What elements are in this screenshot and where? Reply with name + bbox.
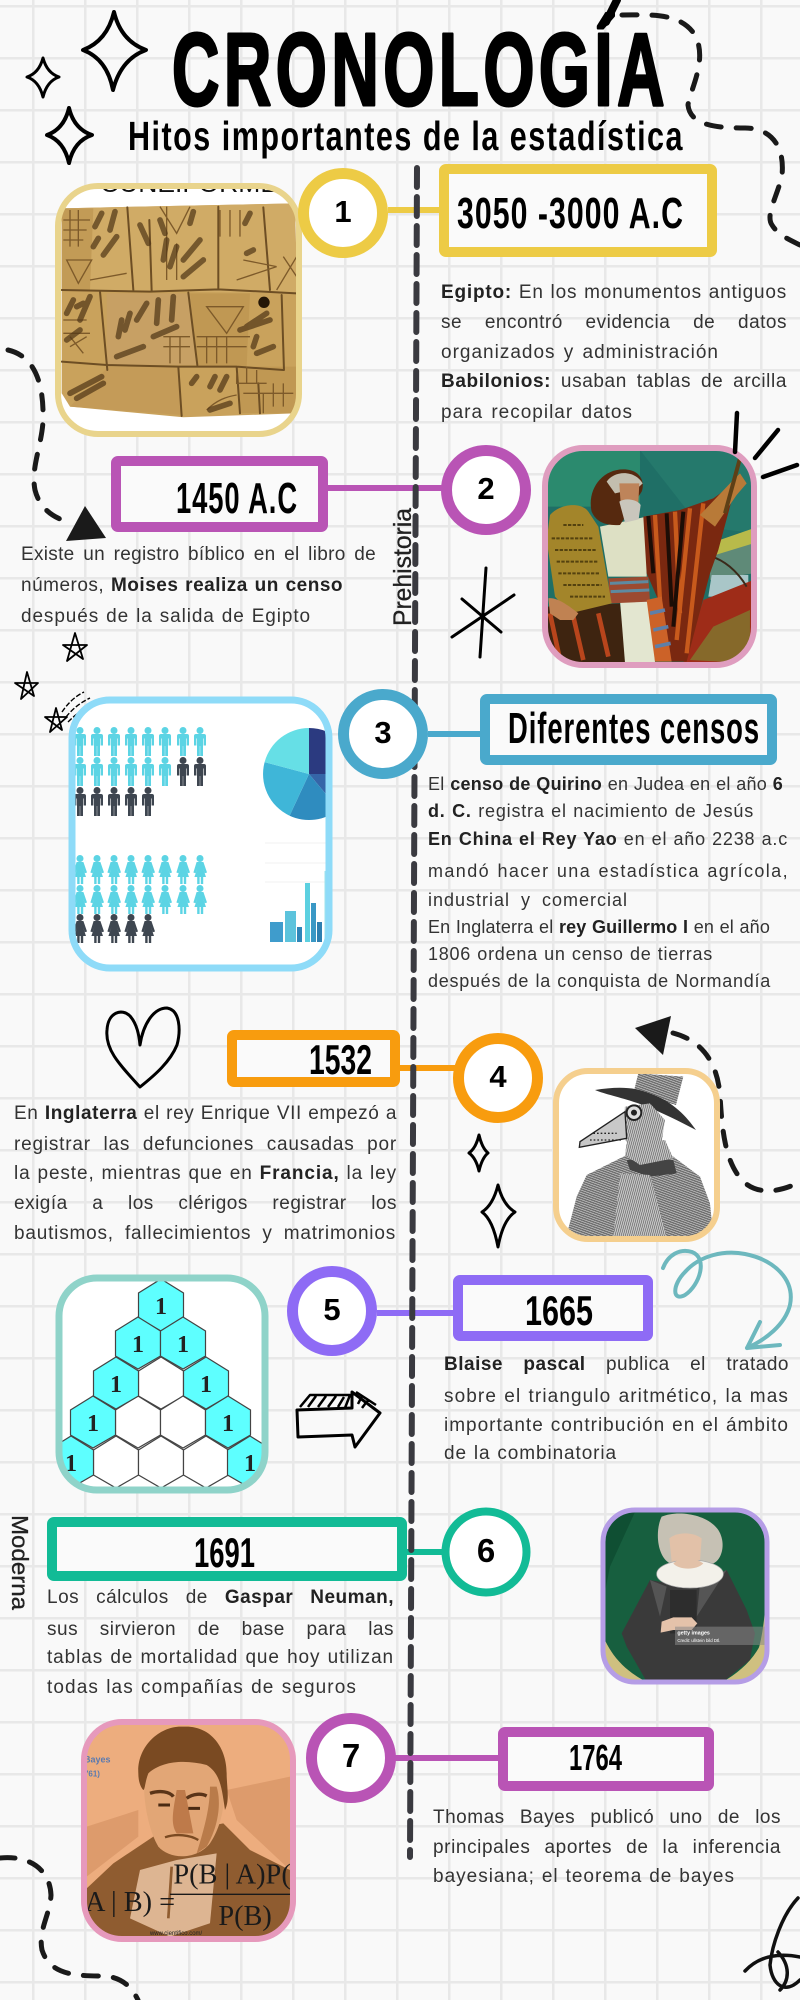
text block: diferentes censos: d. C. registra el nacimiento de Jesús — [428, 801, 754, 821]
text block: diferentes censos: industrial y comercial — [428, 890, 628, 910]
date box 4: 1532 — [309, 1036, 372, 1083]
connectors — [328, 210, 498, 1758]
hexagon numbers: 1 — [222, 1411, 234, 1437]
dashed curve with arrow: plague doctor — [635, 1016, 800, 1191]
text block: Egipto y Babilonios: Egipto: En los monumentos antiguos — [441, 282, 787, 303]
number circle 3 — [344, 694, 422, 774]
hexagon numbers: 1 — [110, 1372, 122, 1398]
icon: doodle stars — [15, 633, 92, 732]
text block: censo de Moises: después de la salida de Egipto — [21, 606, 311, 627]
text block: Blaise Pascal — [444, 1354, 789, 1464]
text block: censo de Moises: Existe un registro bíblico en el libro de — [21, 544, 376, 565]
text block: 1532: En Inglaterra el rey Enrique VII empezó a — [14, 1103, 397, 1124]
panel: Neuman portrait — [600, 1508, 770, 1687]
number circle 7 — [312, 1718, 390, 1798]
date box 6 — [52, 1522, 402, 1576]
number circle 6 — [446, 1512, 526, 1592]
date box 1 — [444, 169, 712, 252]
hexagon numbers: 1 — [65, 1451, 77, 1477]
icon: title sparkles — [27, 12, 146, 163]
text block: Thomas Bayes — [433, 1807, 781, 1887]
text block: Blaise Pascal: importante contribución en el ámbito — [444, 1415, 789, 1436]
number circle 4 — [458, 1038, 538, 1118]
panel: Bayes portrait: Bayes — [84, 1755, 110, 1765]
number circle 6: 6 — [477, 1532, 495, 1569]
text block: Gaspar Neuman: tablas de mortalidad que hoy utilizan — [47, 1647, 394, 1668]
text block: 1532: exigía a los clérigos registrar los — [14, 1193, 397, 1214]
date box 3 — [485, 699, 772, 760]
formula text: P(B | A)P( — [173, 1859, 291, 1890]
text block: diferentes censos: después de la conquista de Normandía — [428, 971, 771, 991]
pie chart — [263, 728, 326, 820]
panel: Bayes portrait: www.cientifico.com/ — [149, 1931, 203, 1937]
panel: Pascal triangle image — [48, 1278, 272, 1490]
text block: Egipto y Babilonios: Babilonios: usaban tablas de arcilla — [441, 371, 787, 392]
hexagon numbers: 1 — [200, 1372, 212, 1398]
text block: Egipto y Babilonios: organizados y administración — [441, 342, 719, 363]
date box 5: 1665 — [525, 1287, 593, 1334]
hexagon numbers: 1 — [244, 1451, 256, 1477]
text block: censo de Moises — [21, 544, 376, 627]
panel: Bayes portrait — [80, 1720, 297, 1943]
dashed curve with arrow: left — [8, 350, 106, 541]
hexagon numbers — [65, 1294, 256, 1477]
date box 5 — [458, 1280, 648, 1336]
text block: Gaspar Neuman — [47, 1587, 394, 1698]
date box 1: 3050 -3000 A.C — [457, 189, 684, 238]
date box 7 — [503, 1732, 709, 1786]
number circle 1 — [304, 174, 382, 252]
people icons: male group — [74, 727, 206, 816]
date box 7: 1764 — [569, 1737, 622, 1778]
icon: heart — [107, 1008, 179, 1087]
text block: censo de Moises: números, Moises realiza un censo — [21, 575, 343, 596]
people icons: female group — [73, 855, 207, 943]
icon: small sparkles — [469, 1135, 515, 1247]
icon: bottom right scribble — [745, 1898, 800, 1990]
dashed curve: top right — [622, 15, 800, 245]
panel: Moses image — [540, 440, 760, 670]
number circle 3: 3 — [374, 715, 392, 750]
number circle 4: 4 — [489, 1059, 507, 1094]
text block: Blaise Pascal: sobre el triangulo aritmético, la mas — [444, 1386, 789, 1407]
panel: census icons and charts — [72, 700, 355, 968]
number circle 1: 1 — [334, 194, 352, 229]
text block: 1532: la peste, mientras que en Francia, la ley — [14, 1163, 397, 1184]
text block: Gaspar Neuman: Los cálculos de Gaspar Neuman, — [47, 1587, 394, 1608]
text block: Egipto y Babilonios: para recopilar datos — [441, 402, 633, 423]
formula text — [85, 1859, 291, 1932]
number circle 2: 2 — [477, 471, 495, 506]
panel: cuneiform tablet image — [58, 171, 299, 434]
text block: diferentes censos: mandó hacer una estadística agrícola, — [428, 861, 789, 881]
number circle 5 — [292, 1272, 372, 1350]
date box 2: 1450 A.C — [176, 474, 298, 523]
getty watermark — [675, 1627, 768, 1645]
text block: diferentes censos — [428, 774, 789, 991]
icon: teal swirl arrow — [663, 1251, 791, 1348]
hexagon numbers: 1 — [155, 1294, 167, 1320]
number circle 2 — [446, 450, 526, 530]
hexagon grid — [94, 1357, 228, 1488]
hexagon numbers: 1 — [87, 1411, 99, 1437]
text block: diferentes censos: En China el Rey Yao en el año 2238 a.c — [428, 829, 788, 849]
icon: burst lines near Moses — [735, 413, 797, 477]
text block: 1532 — [14, 1103, 397, 1244]
panel: cuneiform tablet image: CUNEIFORME — [100, 171, 278, 198]
hexagon numbers: 1 — [132, 1332, 144, 1358]
date box 4 — [232, 1035, 395, 1083]
number circle 5: 5 — [323, 1292, 341, 1327]
text block: 1532: bautismos, fallecimientos y matrimonios — [14, 1223, 396, 1244]
text block: Thomas Bayes: Thomas Bayes publicó uno de los — [433, 1807, 781, 1828]
text block: Gaspar Neuman: sus sirvieron de base para las — [47, 1619, 394, 1640]
text block: diferentes censos: El censo de Quirino en Judea en el año 6 — [428, 774, 783, 794]
text block: Blaise Pascal: Blaise pascal publica el tratado — [444, 1354, 789, 1375]
era label: Moderna: Moderna — [7, 1515, 33, 1610]
panel: plague doctor image — [556, 1071, 717, 1239]
date box 6: 1691 — [194, 1529, 255, 1576]
bar chart — [265, 843, 329, 942]
era label: Prehistoria: Prehistoria — [389, 508, 417, 626]
dashed curve: bottom left — [0, 1858, 138, 2000]
text block: Gaspar Neuman: todas las compañías de seguros — [47, 1677, 357, 1698]
text block: 1532: registrar las defunciones causadas por — [14, 1134, 397, 1155]
text block: Egipto y Babilonios: se encontró evidencia de datos — [441, 312, 787, 333]
timeline dashed axis — [410, 168, 417, 1857]
icon: hand drawn arrow — [297, 1392, 380, 1447]
text block: diferentes censos: 1806 ordena un censo de tierras — [428, 944, 713, 964]
number circle 7: 7 — [342, 1737, 360, 1774]
formula text: P(B) — [218, 1901, 272, 1932]
text block: Thomas Bayes: principales aportes de la inferencia — [433, 1837, 781, 1858]
date box 2 — [116, 461, 323, 527]
panel: Neuman portrait: getty images — [677, 1630, 710, 1636]
text block: Blaise Pascal: de la combinatoria — [444, 1443, 617, 1464]
text block: Thomas Bayes: bayesiana; el teorema de bayes — [433, 1866, 735, 1887]
panel: Neuman portrait: Credit: ullstein bild Dtl. — [677, 1638, 720, 1643]
hexagon numbers: 1 — [177, 1332, 189, 1358]
text block: Egipto y Babilonios — [441, 282, 787, 423]
icon: asterisk doodle — [452, 568, 514, 657]
formula text: A | B) = — [85, 1887, 175, 1918]
text block: diferentes censos: En Inglaterra el rey Guillermo I en el año — [428, 917, 770, 937]
panel: Bayes portrait: 761) — [84, 1770, 100, 1779]
